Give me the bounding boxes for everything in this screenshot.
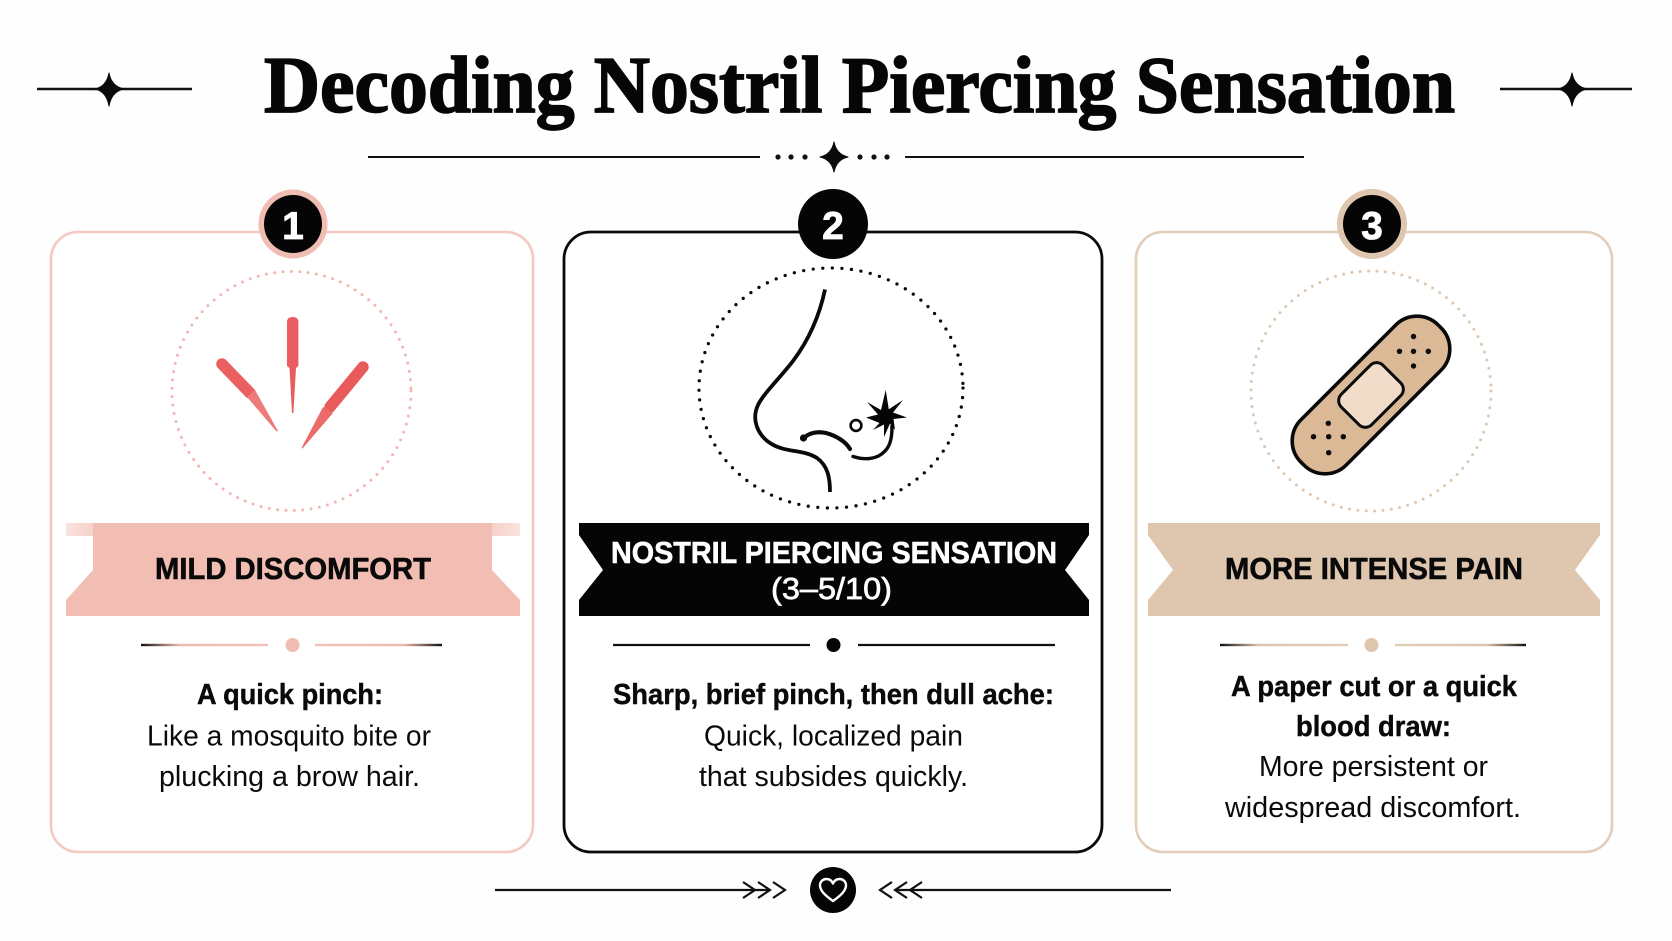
ribbon 1: MILD DISCOMFORT: [155, 551, 431, 586]
number badge 1: 1: [282, 205, 304, 248]
description 2: Quick, localized pain: [704, 720, 963, 752]
description 1: [147, 679, 431, 793]
dotted circle 1: [172, 272, 411, 510]
title ornament left: [37, 73, 192, 106]
description 3: More persistent or: [1259, 751, 1488, 783]
panel: more intense pain: [1136, 189, 1612, 852]
dotted ellipse 2: [699, 268, 963, 508]
ribbon 2: [579, 523, 1089, 616]
panel: nostril piercing sensation: [564, 189, 1102, 852]
description 1: Like a mosquito bite or: [147, 720, 431, 752]
number badge 1: [258, 190, 328, 258]
card outline 3: [1136, 232, 1612, 852]
number badge 3: [1337, 189, 1407, 259]
ribbon 3: MORE INTENSE PAIN: [1225, 551, 1523, 586]
description 2: [613, 679, 1054, 793]
description 2: that subsides quickly.: [699, 761, 968, 793]
divider 1: [141, 638, 442, 652]
title underline divider: [368, 142, 1304, 172]
ribbon 2: NOSTRIL PIERCING SENSATION: [611, 535, 1057, 570]
divider 2: [613, 638, 1055, 652]
title ornament right: [1500, 73, 1632, 106]
number badge 2: [798, 189, 868, 259]
description 2: Sharp, brief pinch, then dull ache:: [613, 679, 1054, 711]
description 1: plucking a brow hair.: [159, 761, 420, 793]
description 3: A paper cut or a quick: [1231, 671, 1518, 703]
description 3: blood draw:: [1296, 711, 1451, 743]
panel: mild discomfort: [51, 190, 533, 852]
description 1: A quick pinch:: [197, 679, 383, 711]
icon: adhesive bandage: [1280, 304, 1462, 486]
dotted circle 3: [1251, 271, 1491, 511]
number badge 2: 2: [822, 205, 844, 248]
description 3: [1224, 671, 1521, 824]
divider 3: [1220, 638, 1526, 652]
ribbon 3: [1148, 523, 1600, 616]
icon: pinch needles: [222, 317, 363, 448]
description 3: widespread discomfort.: [1224, 792, 1521, 824]
card outline 1: [51, 232, 533, 852]
title: Decoding Nostril Piercing Sensation: [264, 42, 1455, 130]
footer ornament with heart: [495, 867, 1171, 913]
icon: nose with piercing burst: [755, 290, 907, 492]
number badge 3: 3: [1361, 205, 1383, 248]
ribbon 2: (3–5/10): [771, 571, 892, 606]
ribbon 1: [66, 523, 520, 616]
card outline 2: [564, 232, 1102, 852]
